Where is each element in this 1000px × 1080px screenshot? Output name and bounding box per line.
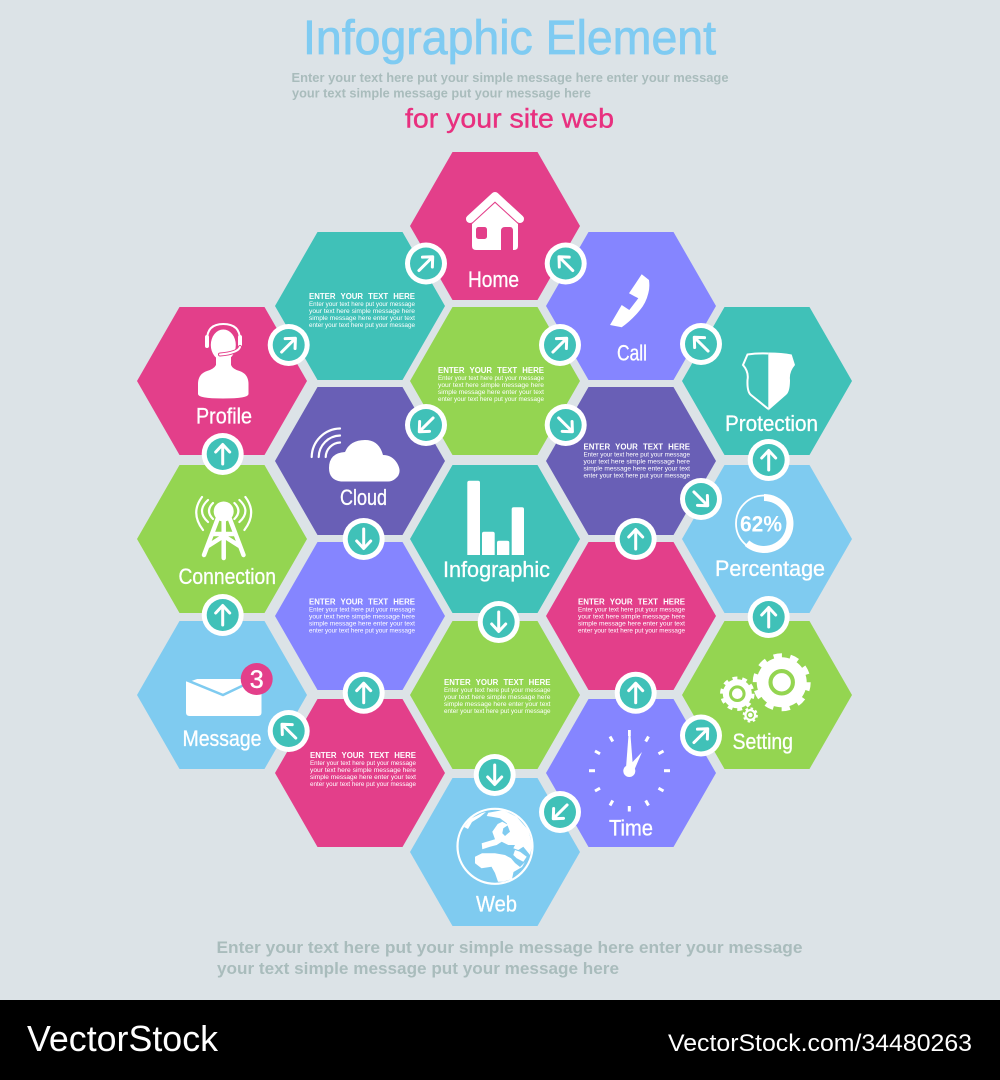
- panel: web: [410, 778, 580, 926]
- panel: protection: [682, 307, 852, 455]
- arrow: teal to home: [396, 234, 456, 293]
- arrow: purple to percentage: [671, 469, 731, 529]
- icon: globe: [458, 809, 532, 884]
- icon: phone: [610, 274, 649, 327]
- text block: [584, 442, 691, 480]
- text block: simple message here enter your text: [309, 315, 415, 322]
- label: Time: Time: [609, 816, 653, 840]
- footer text: [216, 938, 802, 978]
- arrow: percentage to protection: [748, 439, 790, 481]
- text block: enter your text here put your message: [309, 628, 415, 635]
- text block: [309, 292, 416, 329]
- panel: setting: [682, 621, 852, 769]
- text block: ENTER YOUR TEXT HERE: [578, 598, 686, 606]
- label: Setting: Setting: [732, 729, 793, 754]
- subtitle: for your site web: [405, 104, 614, 134]
- label: Protection: Protection: [725, 411, 818, 436]
- arrow: green to purple: [536, 395, 595, 455]
- panel: infographic centre: [410, 465, 580, 613]
- arrow: green to cloud: [396, 395, 456, 455]
- text block: Enter your text here put your message: [444, 687, 551, 694]
- panel: green text lower: [410, 621, 580, 769]
- text block: Enter your text here put your message: [309, 301, 415, 308]
- text block: enter your text here put your message: [444, 708, 551, 715]
- icon: 62% ring: [736, 496, 792, 552]
- text block: simple message here enter your text: [584, 466, 690, 472]
- footer text: your text simple message put your message here: [217, 959, 619, 978]
- text block: Enter your text here put your message: [309, 606, 415, 613]
- arrow: pink lower to message: [259, 701, 318, 761]
- text block: enter your text here put your message: [438, 396, 544, 403]
- panel: time: [546, 699, 716, 847]
- text block: [438, 366, 545, 403]
- label: Percentage: Percentage: [715, 556, 825, 581]
- text block: [444, 678, 551, 715]
- text block: your text here simple message here: [444, 694, 551, 701]
- intro text: your text simple message put your message here: [292, 86, 591, 100]
- text block: simple message here enter your text: [309, 620, 415, 628]
- icon: envelope: 3: [250, 666, 264, 694]
- text block: ENTER YOUR TEXT HERE: [309, 598, 416, 606]
- label: Cloud: Cloud: [340, 485, 387, 510]
- text block: [578, 598, 686, 635]
- text block: enter your text here put your message: [310, 781, 416, 788]
- panel: pink text lower: [275, 699, 445, 847]
- arrow: message to connection: [202, 594, 244, 636]
- panel: call: [546, 232, 716, 380]
- watermark bar: [0, 1000, 1000, 1080]
- icon: 62% ring: 62%: [740, 512, 782, 537]
- label: Profile: Profile: [196, 404, 252, 428]
- label: Call: Call: [617, 340, 647, 366]
- panel: percentage: [682, 465, 852, 613]
- icon: gears: [722, 656, 808, 722]
- arrow: setting to percentage: [748, 596, 790, 638]
- arrow: time to web: [530, 782, 590, 842]
- text block: your text here simple message here: [584, 458, 690, 465]
- text block: Enter your text here put your message: [438, 375, 544, 382]
- arrow: pink lower to lavender: [343, 672, 385, 714]
- text block: simple message here enter your text: [310, 774, 416, 781]
- arrow: call to home: [536, 234, 595, 293]
- icon: clock: [589, 730, 670, 812]
- icon: envelope: [186, 663, 273, 716]
- text block: [310, 751, 417, 788]
- text block: simple message here enter your text: [578, 620, 685, 628]
- text block: simple message here enter your text: [444, 701, 551, 708]
- footer text: Enter your text here put your simple message here enter your message: [216, 938, 802, 957]
- arrow: profile to teal: [259, 315, 318, 375]
- panel: teal text: [275, 232, 445, 380]
- panel: connection: [137, 465, 307, 613]
- label: Home: Home: [468, 267, 519, 292]
- intro text: Enter your text here put your simple message here enter your message: [292, 70, 728, 85]
- panel: purple text: [546, 387, 716, 535]
- arrow: green lower to web: [474, 754, 516, 796]
- text block: your text here simple message here: [438, 382, 544, 389]
- text block: ENTER YOUR TEXT HERE: [444, 678, 551, 687]
- label: Infographic: Infographic: [443, 557, 550, 582]
- text block: enter your text here put your message: [584, 473, 690, 480]
- panel: cloud: [275, 387, 445, 535]
- text block: ENTER YOUR TEXT HERE: [438, 366, 545, 375]
- text block: your text here simple message here: [309, 613, 415, 620]
- arrow: cloud to lavender: [343, 518, 385, 560]
- panel: profile: [137, 307, 307, 455]
- text block: simple message here enter your text: [438, 389, 544, 396]
- text block: your text here simple message here: [578, 613, 685, 620]
- icon: antenna tower: [196, 497, 251, 558]
- text block: your text here simple message here: [310, 767, 416, 774]
- arrow: connection to profile: [202, 433, 244, 475]
- text block: ENTER YOUR TEXT HERE: [310, 751, 417, 760]
- label: Web: Web: [476, 892, 517, 916]
- arrow: time to pink: [615, 672, 657, 714]
- text block: your text here simple message here: [309, 308, 415, 315]
- icon: shield: [743, 352, 795, 410]
- panel: pink text right: [546, 542, 716, 690]
- watermark bar: VectorStock.com/34480263: [668, 1030, 972, 1057]
- intro text: [292, 70, 728, 100]
- text block: Enter your text here put your message: [584, 451, 690, 458]
- text block: Enter your text here put your message: [310, 760, 416, 767]
- text block: enter your text here put your message: [578, 628, 685, 635]
- arrow: centre to green lower: [478, 601, 520, 643]
- panel: green text upper: [410, 307, 580, 455]
- label: Message: Message: [182, 726, 262, 751]
- text block: [309, 598, 416, 635]
- watermark bar: VectorStock: [27, 1018, 219, 1059]
- panel: message: [137, 621, 307, 769]
- text block: enter your text here put your message: [309, 322, 415, 329]
- icon: bar chart: [467, 481, 524, 555]
- icon: house: [470, 196, 520, 250]
- label: Connection: Connection: [178, 564, 276, 589]
- panel: lavender text: [275, 542, 445, 690]
- arrow: time to setting: [671, 706, 731, 765]
- arrow: green to call: [530, 315, 590, 375]
- icon: cloud with signal: [312, 428, 400, 482]
- arrow: pink to purple: [615, 518, 657, 560]
- panel: home: [410, 152, 580, 300]
- text block: ENTER YOUR TEXT HERE: [584, 442, 691, 452]
- arrow: protection to call: [671, 314, 731, 374]
- text block: Enter your text here put your message: [578, 606, 685, 613]
- text block: ENTER YOUR TEXT HERE: [309, 292, 416, 301]
- icon: headset person: [198, 324, 248, 398]
- title: Infographic Element: [303, 12, 716, 65]
